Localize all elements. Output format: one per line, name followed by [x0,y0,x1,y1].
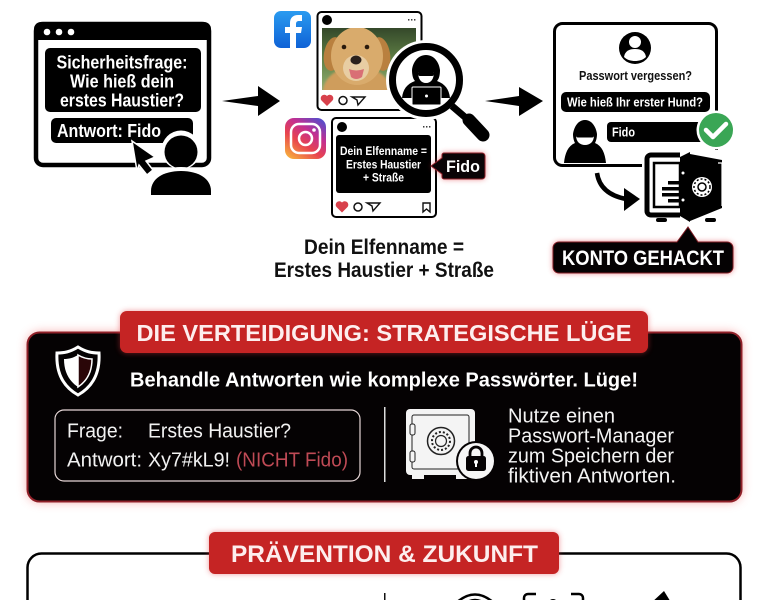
subtitle: Behandle Antworten wie komplexe Passwörter. Lüge! [130,370,638,392]
panel: instagram post: ··· [422,122,432,132]
example answer box [55,410,360,481]
post text box: Erstes Haustier [346,158,421,172]
icon: face scan frame [524,594,583,600]
icon: shield [57,347,99,395]
icon: avatar [619,32,651,64]
icon: instagram logo [285,118,326,159]
password manager text: Passwort-Manager [508,426,674,448]
panel: prevention and future [28,532,740,600]
answer field [607,122,705,142]
icon: hacker [564,120,606,163]
icon: facebook logo [274,11,311,48]
hacker figure [402,55,450,105]
callout: Konto gehackt [553,227,733,273]
post text box [336,135,431,193]
panel: instagram post [332,118,436,217]
panel: password recovery card: Passwort vergessen? [579,68,692,83]
password manager text: zum Speichern der [508,446,674,468]
icon: mouse cursor [132,141,155,175]
arrow: to social media [222,86,280,116]
icon: magnifier with hacker [386,40,483,135]
icon: open safe [642,150,728,226]
panel: defense [27,311,742,502]
question box: erstes Haustier? [60,90,184,110]
icon: success check [696,110,736,150]
heading badge: prevention: PRÄVENTION & ZUKUNFT [231,541,538,568]
icon: padlock [456,441,496,481]
caption: Elfenname formula: Dein Elfenname = [304,236,464,259]
post text box: + Straße [363,170,404,184]
question pill [561,92,710,112]
heading badge: defense [120,311,648,353]
answer field: Antwort: Fido [57,121,161,141]
photo: golden retriever [322,28,416,90]
callout: Konto gehackt: KONTO GEHACKT [562,247,724,270]
example answer box: Antwort: [67,450,142,472]
panel: security question window [34,22,211,165]
heading badge: prevention [209,532,559,574]
answer field [51,118,193,143]
panel: password recovery card [554,24,716,166]
callout: Fido [431,153,485,179]
question box: Wie hieß dein [70,70,174,92]
post actions [336,201,348,212]
caption: Elfenname formula [274,236,494,282]
post actions [321,95,333,106]
example answer box: Xy7#kL9! [148,450,230,472]
example answer box: Erstes Haustier? [148,420,291,442]
panel: facebook post: ··· [408,15,416,25]
answer field: Fido [612,124,635,140]
post text box: Dein Elfenname = [340,144,427,158]
password manager text: Nutze einen [508,406,615,428]
callout: Fido: Fido [446,157,480,176]
caption: Elfenname formula: Erstes Haustier + Straße [274,259,494,282]
question pill: Wie hieß Ihr erster Hund? [567,94,703,110]
panel: facebook post [318,12,422,118]
password manager text [508,406,676,488]
password manager text: fiktiven Antworten. [508,466,676,488]
question box: Sicherheitsfrage: [56,52,188,72]
icon: user [148,130,214,195]
question box [45,48,201,112]
arrow: curved to safe [597,173,640,211]
icon: shield tip [650,591,672,600]
arrow: to account recovery [485,87,543,116]
icon: safe with lock [406,409,496,481]
example answer box: Frage: [67,420,123,442]
icon: wireless signal [456,594,494,600]
example answer box: (NICHT Fido) [236,450,348,472]
heading badge: defense: DIE VERTEIDIGUNG: STRATEGISCHE LÜGE [136,320,632,346]
